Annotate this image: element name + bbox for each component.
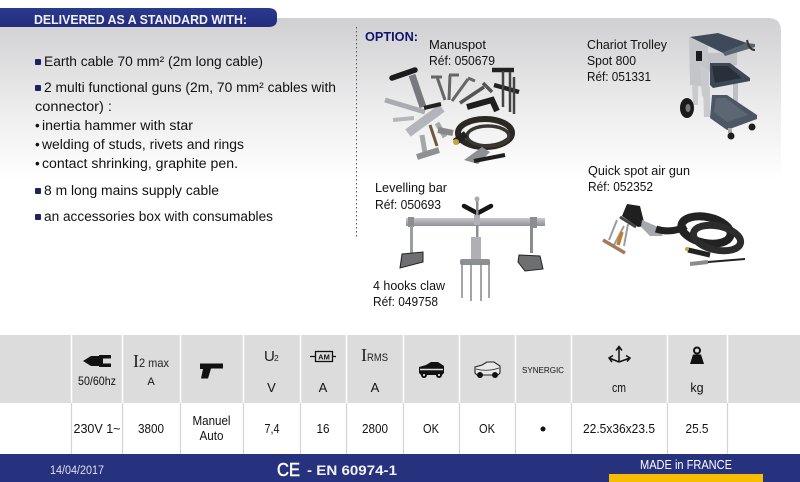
icon: dimensions axes bbox=[609, 346, 630, 362]
text block: standard equipment list: connector) : bbox=[35, 99, 112, 114]
header: frequency: 50/60hz bbox=[78, 374, 116, 388]
table: technical specifications bbox=[0, 335, 800, 454]
label: Chariot Trolley bbox=[587, 38, 668, 84]
label: Chariot Trolley: Chariot Trolley bbox=[587, 38, 668, 52]
table values: 22.5x36x23.5 bbox=[583, 421, 655, 436]
heading: option: OPTION: bbox=[365, 29, 418, 44]
icon: plug bbox=[83, 355, 111, 367]
header: fuse amps: AM bbox=[318, 352, 330, 362]
header: U2 volts bbox=[264, 348, 279, 395]
heading tab: delivered as standard: DELIVERED AS A STANDARD WITH: bbox=[34, 12, 247, 27]
header: fuse amps: A bbox=[319, 380, 328, 395]
header: I RMS bbox=[361, 345, 388, 395]
certification: CE bbox=[277, 460, 300, 480]
table values: 2800 bbox=[362, 421, 388, 436]
header: I2 max: 2 max bbox=[139, 356, 169, 370]
header: U2 volts: U bbox=[264, 348, 275, 365]
footer bar: - EN 60974-1 bbox=[307, 462, 397, 478]
header: fuse amps bbox=[310, 352, 336, 395]
icon: outline car bbox=[475, 362, 500, 378]
label: 4 hooks claw bbox=[373, 279, 446, 309]
footer bar bbox=[0, 454, 800, 482]
footer date: 14/04/2017 bbox=[50, 465, 104, 477]
header: synergic: SYNERGIC bbox=[522, 366, 564, 375]
table values: 25.5 bbox=[686, 421, 708, 436]
header: kg: kg bbox=[690, 381, 704, 395]
table values: 7,4 bbox=[264, 421, 280, 436]
text block: standard equipment list: • bbox=[35, 118, 40, 133]
icon: welding gun bbox=[200, 364, 223, 378]
text block: standard equipment list: Earth cable 70 mm² (2m long cable) bbox=[44, 54, 263, 69]
label: Manuspot: Réf: 050679 bbox=[429, 54, 495, 68]
header: I2 max: A bbox=[147, 376, 155, 388]
table values: OK bbox=[423, 421, 439, 436]
table values: Manuel bbox=[192, 413, 231, 428]
label: 4 hooks claw: Réf: 049758 bbox=[373, 295, 438, 309]
text block: standard equipment list: an accessories box with consumables bbox=[44, 209, 273, 224]
header: cm: cm bbox=[612, 381, 626, 395]
panel: standard equipment and options background bbox=[0, 18, 781, 180]
yellow strip bbox=[609, 474, 763, 482]
label: Manuspot: Manuspot bbox=[429, 38, 487, 52]
image: Manuspot kit bbox=[385, 70, 519, 164]
header: U2 volts: V bbox=[267, 380, 276, 395]
table values: 16 bbox=[316, 421, 330, 436]
header: I RMS: RMS bbox=[367, 352, 388, 364]
label: Quick spot air gun bbox=[588, 164, 690, 194]
image: quick spot air gun bbox=[603, 204, 745, 264]
table header row bbox=[0, 335, 800, 403]
heading tab: delivered as standard bbox=[0, 8, 277, 27]
text block: standard equipment list bbox=[35, 54, 336, 224]
text block: standard equipment list: • bbox=[35, 137, 40, 152]
text block: standard equipment list: welding of studs, rivets and rings bbox=[41, 137, 244, 152]
label: 4 hooks claw: 4 hooks claw bbox=[373, 279, 446, 293]
table values: 3800 bbox=[138, 421, 164, 436]
text block: standard equipment list: contact shrinking, graphite pen. bbox=[42, 156, 238, 171]
text block: standard equipment list: inertia hammer with star bbox=[42, 118, 194, 133]
table values: Auto bbox=[200, 428, 224, 443]
header: I RMS: A bbox=[371, 380, 380, 395]
table values: OK bbox=[479, 421, 495, 436]
header: I RMS: I bbox=[361, 345, 367, 365]
label: Chariot Trolley: Spot 800 bbox=[587, 54, 636, 68]
image: trolley bbox=[680, 33, 757, 140]
table values bbox=[74, 413, 708, 443]
label: Levelling bar: Levelling bar bbox=[375, 181, 447, 195]
table values: 230V 1~ bbox=[74, 421, 121, 436]
label: Manuspot bbox=[429, 38, 495, 68]
label: Chariot Trolley: Réf: 051331 bbox=[587, 70, 651, 84]
header: I2 max: I bbox=[133, 351, 139, 371]
header: I2 max bbox=[133, 351, 169, 388]
table value row bbox=[0, 403, 800, 454]
text block: standard equipment list: • bbox=[35, 156, 40, 171]
header: U2 volts: 2 bbox=[274, 353, 279, 363]
text block: standard equipment list: 8 m long mains supply cable bbox=[44, 183, 219, 198]
label: Quick spot air gun: Réf: 052352 bbox=[588, 180, 653, 194]
label: Quick spot air gun: Quick spot air gun bbox=[588, 164, 690, 178]
label: Levelling bar bbox=[375, 181, 447, 212]
icon: solid car bbox=[419, 362, 444, 378]
text block: standard equipment list: 2 multi functional guns (2m, 70 mm² cables with bbox=[44, 80, 336, 95]
image: levelling bar with claw bbox=[400, 196, 545, 301]
label: Levelling bar: Réf: 050693 bbox=[375, 198, 441, 212]
made in France: MADE in FRANCE bbox=[640, 457, 732, 472]
icon: weight bbox=[690, 348, 704, 364]
